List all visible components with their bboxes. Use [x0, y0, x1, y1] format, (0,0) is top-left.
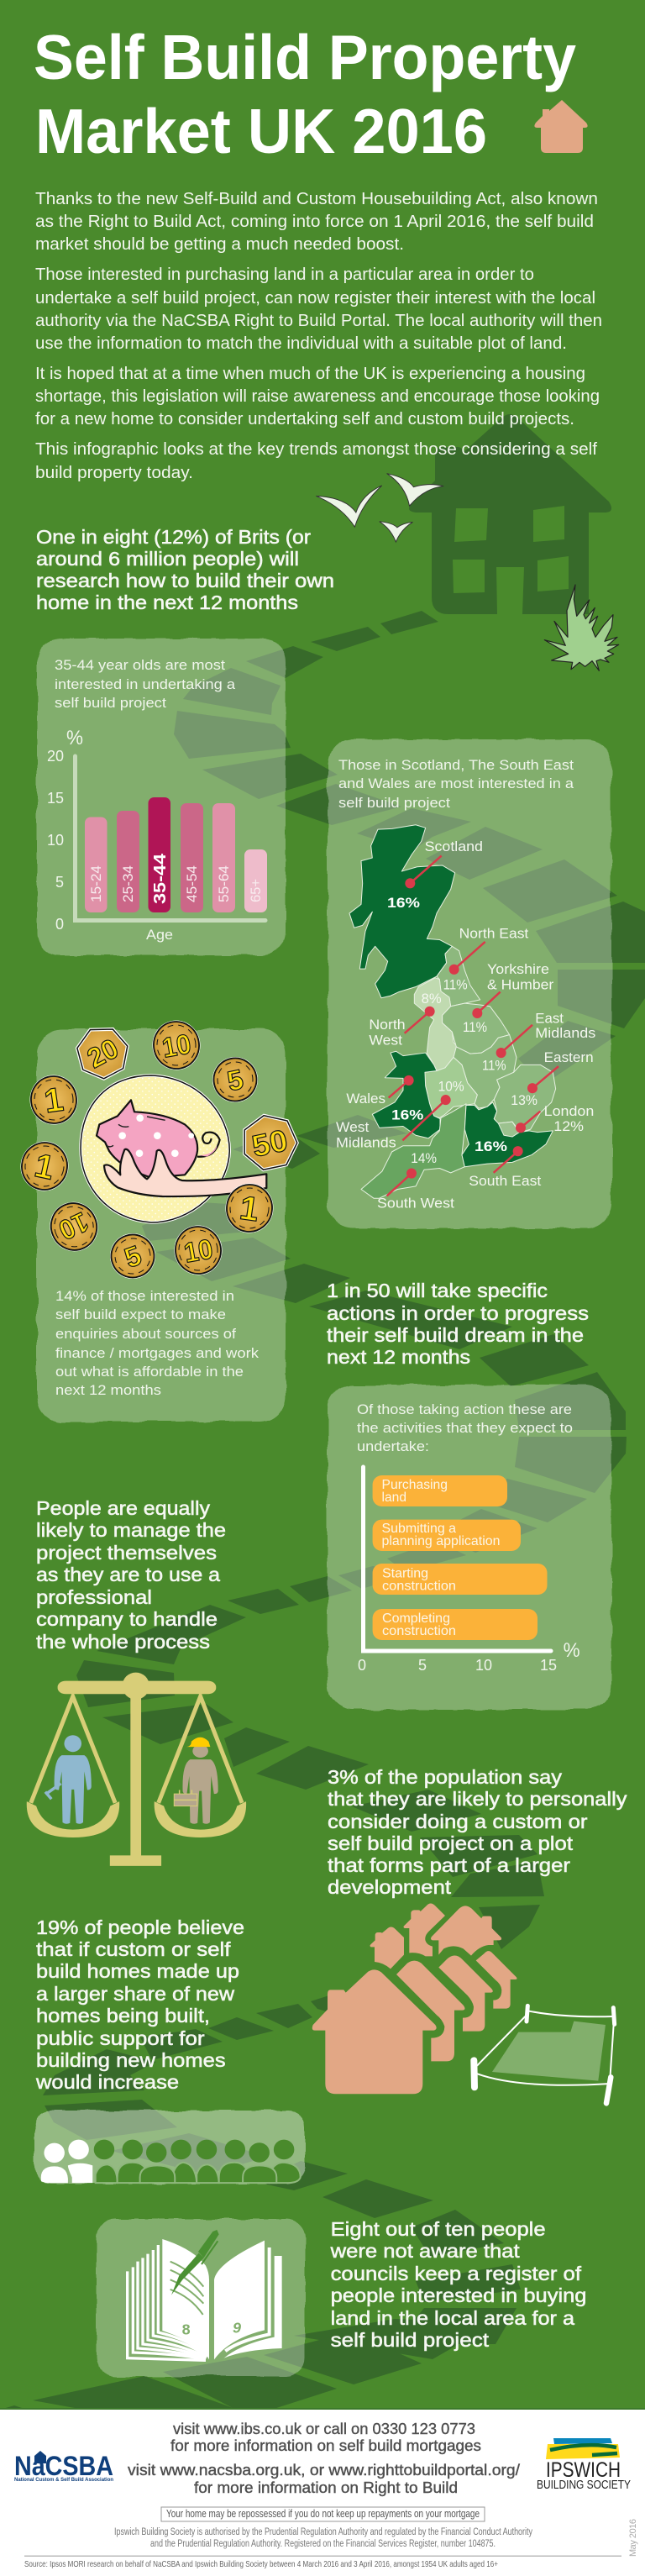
panel text: finance: 14% of those interested in: [55, 1288, 234, 1304]
bar chart: age: 35-44: [151, 853, 170, 904]
map region labels: London: [544, 1105, 594, 1119]
panel text: age: interested in undertaking a: [55, 676, 236, 692]
text: people are equally likely: as they are to use a: [36, 1564, 221, 1585]
text: people are equally likely: likely to manage the: [36, 1519, 226, 1541]
coin 1 lower right: [223, 1180, 276, 1236]
icon: open book and pen: [128, 2230, 282, 2360]
coin 1 left: 1: [31, 1147, 57, 1187]
horizontal bar chart: Starting: [382, 1566, 428, 1581]
horizontal bar chart: 5: [418, 1657, 427, 1674]
heading: 1 in 50: [327, 1280, 589, 1368]
coin 20: 20: [82, 1033, 123, 1074]
icon: open book and pen: 8: [182, 2321, 191, 2337]
text: 19% of people: would increase: [35, 2071, 179, 2093]
panel: regional map: [328, 739, 611, 1228]
heading: one in eight: One in eight (12%) of Brits (or: [36, 526, 311, 548]
map pins: [387, 856, 558, 1196]
map region labels: Eastern: [544, 1050, 594, 1065]
footer: [0, 2410, 645, 2576]
horizontal bar chart: %: [564, 1639, 580, 1662]
bar chart: age: 15: [47, 790, 64, 807]
icon: balance scales with two people: [27, 1673, 246, 1866]
text: eight out of ten: self build project: [331, 2329, 490, 2351]
heading: one in eight: around 6 million people) will: [36, 548, 299, 570]
bar chart: age: 5: [55, 874, 64, 891]
heading: one in eight: home in the next 12 months: [36, 591, 298, 613]
panel: finance and coins: [16, 1017, 302, 1422]
repossession warning box: Your home may be repossessed if you do not keep up repayments on your mortgage: [166, 2508, 480, 2520]
figure: self builder in blue: [45, 1735, 92, 1824]
coin 1 left: [16, 1137, 73, 1196]
bar chart: age: 20: [47, 748, 64, 765]
bar chart: age: 45-54: [184, 865, 200, 902]
horizontal bar chart: construction: [382, 1624, 456, 1638]
intro text: authority via the NaCSBA Right to Build Portal. The local authority will then: [35, 312, 602, 330]
contact details: [128, 2421, 520, 2496]
title: Self Build Property: [34, 22, 576, 92]
title: Market UK 2016: [35, 96, 487, 166]
contact details: visit www.ibs.co.uk or call on 0330 123 0773: [173, 2421, 475, 2437]
coin 10 inverted: 10: [55, 1207, 93, 1246]
intro text: undertake a self build project, can now register their interest with the local: [35, 289, 595, 308]
panel text: finance: self build expect to make: [55, 1306, 226, 1322]
text: 19% of people: building new homes: [36, 2049, 226, 2071]
text: 3% of the population: consider doing a custom or: [328, 1811, 588, 1832]
icon: marked out plot of land: [474, 2006, 615, 2103]
coin 5 top right: [208, 1053, 262, 1107]
logo: Ipswich Building Society: IPSWICH: [546, 2458, 621, 2482]
map region labels: 12%: [553, 1119, 584, 1134]
map region labels: Midlands: [535, 1027, 595, 1041]
panel text: activities: undertake:: [357, 1438, 429, 1454]
panel: activities chart: [328, 1385, 611, 1710]
coin 10 top: [149, 1017, 204, 1074]
text: people are equally likely: the whole process: [36, 1631, 210, 1653]
map region labels: Scotland: [425, 839, 483, 854]
map region values: 11%: [463, 1021, 487, 1035]
text: people are equally likely: company to handle: [36, 1608, 218, 1630]
panel: crowd of people: [34, 2111, 305, 2184]
text: 19% of people: 19% of people believe: [36, 1916, 244, 1938]
text: eight out of ten: were not aware that: [330, 2240, 520, 2262]
text: people are equally likely: project themselves: [36, 1542, 217, 1564]
coin 1 upper left: 1: [42, 1081, 66, 1120]
panel: register book: [97, 2219, 305, 2376]
panel text: finance: [55, 1288, 260, 1398]
panel text: finance: finance / mortgages and work: [55, 1345, 260, 1361]
panel text: finance: next 12 months: [55, 1382, 161, 1398]
panel text: activities: the activities that they expect to: [357, 1420, 573, 1436]
map region values: 16%: [391, 1108, 423, 1123]
text: people are equally likely: [36, 1497, 226, 1653]
map region labels: & Humber: [487, 978, 554, 993]
big dark house silhouette: [409, 414, 611, 614]
panel text: regions: self build project: [338, 795, 450, 811]
logo: NaCSBA: NaCSBA: [14, 2451, 113, 2481]
coins: [16, 1017, 302, 1285]
crowd icons, two of ten white: [41, 2140, 301, 2183]
map region labels: Midlands: [336, 1136, 396, 1151]
map region labels: [336, 839, 595, 1212]
map region values: 16%: [387, 896, 420, 911]
bottom edge of green area: [0, 2408, 645, 2410]
map region values: 11%: [443, 978, 468, 993]
intro text: use the information to match the individual with a suitable plot of land.: [35, 334, 567, 353]
horizontal bar chart: 10: [475, 1657, 492, 1674]
figure: professional in hard hat: [174, 1737, 218, 1824]
map region labels: West: [336, 1121, 370, 1135]
text: 3% of the population: 3% of the population say: [328, 1766, 562, 1788]
panel text: activities: Of those taking action these are: [357, 1401, 572, 1417]
intro text: This infographic looks at the key trends amongst those considering a self: [35, 440, 597, 459]
regulatory text: Ipswich Building Society is authorised by the Prudential Regulation Authority and regulated by the Financial Conduct Authority: [114, 2527, 532, 2537]
text: 19% of people: build homes made up: [36, 1960, 239, 1982]
panel text: regions: and Wales are most interested in a: [338, 775, 574, 791]
text: 19% of people: [35, 1916, 244, 2093]
contact details: for more information on Right to Build: [194, 2479, 458, 2496]
panel text: finance: enquiries about sources of: [55, 1326, 236, 1342]
text: eight out of ten: councils keep a register of: [331, 2263, 582, 2284]
map region labels: Wales: [346, 1092, 385, 1107]
coin 5 top right: 5: [224, 1063, 246, 1096]
panel text: finance: out what is affordable in the: [55, 1364, 244, 1380]
intro text: Thanks to the new Self-Build and Custom Housebuilding Act, also known: [35, 190, 598, 208]
icon: open book and pen: 9: [233, 2320, 241, 2337]
repossession warning box: [161, 2507, 485, 2521]
coin 50: [238, 1110, 302, 1173]
map region values: [387, 896, 538, 1166]
coin 1 upper left: [27, 1072, 81, 1128]
intro text: for a new home to consider undertaking self and custom build projects.: [35, 410, 574, 428]
panel text: age: [55, 657, 236, 711]
horizontal bar chart: Submitting a: [381, 1522, 456, 1536]
horizontal bar chart: 15: [540, 1657, 557, 1674]
map region labels: South East: [469, 1174, 542, 1189]
text: eight out of ten: people interested in buying: [331, 2284, 586, 2306]
map region values: 11%: [482, 1059, 506, 1074]
winding stepping stone path: [0, 611, 645, 2410]
text: 19% of people: public support for: [36, 2027, 205, 2049]
map region labels: Yorkshire: [487, 963, 549, 977]
source note: Source: Ipsos MORI research on behalf of NaCSBA and Ipswich Building Society between 4 March 2016 and 3 April 2016, amongst 1954 UK adults aged 16+: [24, 2559, 498, 2569]
contact details: for more information on self build mortgages: [170, 2437, 481, 2454]
coin 50: 50: [249, 1122, 291, 1164]
horizontal bar chart: construction: [382, 1580, 456, 1593]
text: 19% of people: homes being built,: [36, 2005, 210, 2027]
illustration: piggy bank on yellow oval: [81, 1075, 266, 1222]
text: eight out of ten: land in the local area for a: [331, 2307, 575, 2329]
intro text: as the Right to Build Act, coming into force on 1 April 2016, the self build: [35, 213, 594, 231]
horizontal bar chart: Completing: [382, 1611, 450, 1626]
intro text: market should be getting a much needed boost.: [35, 235, 404, 254]
map region values: 10%: [438, 1080, 464, 1095]
icon: birds: [316, 474, 443, 542]
map region labels: East: [535, 1012, 564, 1026]
horizontal bar chart: Purchasing: [381, 1478, 448, 1492]
date stamp: May 2016: [628, 2519, 638, 2557]
text: eight out of ten: Eight out of ten people: [331, 2218, 546, 2240]
bar chart: age: 55-64: [216, 865, 232, 902]
bar chart: age: %: [66, 727, 83, 749]
text: 3% of the population: that forms part of a larger: [328, 1854, 570, 1876]
text: people are equally likely: People are equally: [36, 1497, 210, 1519]
bar chart: age: Age: [146, 927, 173, 943]
intro text: shortage, this legislation will raise awareness and encourage those looking: [35, 387, 600, 406]
icon: grass tuft: [544, 585, 619, 670]
map region values: 13%: [511, 1093, 538, 1108]
heading: 1 in 50: their self build dream in the: [327, 1324, 584, 1346]
text: 3% of the population: development: [328, 1876, 451, 1898]
heading: one in eight: research how to build their own: [36, 570, 334, 591]
coin 10 top: 10: [160, 1028, 193, 1064]
icon: group of houses on a development: [312, 1903, 517, 2094]
horizontal bar chart: 0: [358, 1657, 366, 1674]
horizontal bar chart: land: [381, 1490, 406, 1505]
horizontal bar chart: planning application: [381, 1534, 501, 1548]
text: 19% of people: that if custom or self: [36, 1938, 231, 1960]
logo: NaCSBA: National Custom & Self Build Association: [14, 2477, 113, 2483]
text: 3% of the population: [328, 1766, 627, 1898]
coin 10 bottom: 10: [181, 1233, 215, 1269]
coin 1 lower right: 1: [238, 1190, 261, 1228]
text: eight out of ten: [330, 2218, 586, 2351]
bar chart: age: [47, 727, 267, 943]
map region labels: North: [369, 1018, 406, 1033]
coin 10 bottom: [170, 1222, 226, 1279]
title: [34, 22, 576, 166]
regulatory text: and the Prudential Regulation Authority. Registered on the Financial Services Register, number 104875.: [150, 2539, 496, 2549]
heading: one in eight: [36, 526, 334, 613]
text: 3% of the population: that they are likely to personally: [328, 1788, 627, 1810]
map of UK regions: [336, 825, 595, 1212]
bar chart: age: 15-24: [88, 865, 104, 902]
panel text: regions: Those in Scotland, The South East: [338, 757, 574, 773]
intro text: It is hoped that at a time when much of the UK is experiencing a housing: [35, 365, 585, 383]
panel text: activities: [357, 1401, 573, 1454]
map region labels: West: [369, 1033, 403, 1049]
bar chart: age: 0: [55, 916, 64, 933]
intro text: build property today.: [35, 464, 193, 482]
map region values: 16%: [475, 1139, 507, 1154]
heading: 1 in 50: actions in order to progress: [327, 1302, 589, 1324]
coin 5 bottom: 5: [120, 1239, 145, 1274]
panel text: age: 35-44 year olds are most: [55, 657, 225, 673]
coin 10 inverted: [42, 1194, 106, 1259]
text: people are equally likely: professional: [36, 1586, 152, 1608]
text: 19% of people: a larger share of new: [36, 1983, 235, 2005]
map region values: 8%: [422, 992, 442, 1007]
panel text: regions: [338, 757, 574, 811]
heading: 1 in 50: next 12 months: [327, 1346, 470, 1368]
coin 5 bottom: [103, 1227, 162, 1285]
map region labels: South West: [377, 1196, 455, 1212]
map region values: 14%: [411, 1152, 437, 1166]
panel: age chart: [37, 639, 286, 955]
contact details: visit www.nacsba.org.uk, or www.righttobuildportal.org/: [128, 2462, 520, 2479]
bar chart: age: 10: [47, 832, 64, 849]
regulatory text: [114, 2527, 532, 2549]
intro text: [35, 190, 602, 482]
panel text: age: self build project: [55, 695, 166, 711]
horizontal bar chart: [358, 1467, 580, 1674]
coin 20: [68, 1018, 136, 1086]
map region labels: North East: [459, 927, 529, 942]
icon: small house: [534, 100, 588, 153]
heading: 1 in 50: 1 in 50 will take specific: [327, 1280, 548, 1301]
intro text: Those interested in purchasing land in a particular area in order to: [35, 265, 534, 284]
bar chart: age: 25-34: [120, 865, 136, 902]
logo: Ipswich Building Society: [537, 2438, 631, 2492]
bar chart: age: 65+: [248, 879, 264, 902]
text: 3% of the population: self build project on a plot: [328, 1832, 574, 1854]
